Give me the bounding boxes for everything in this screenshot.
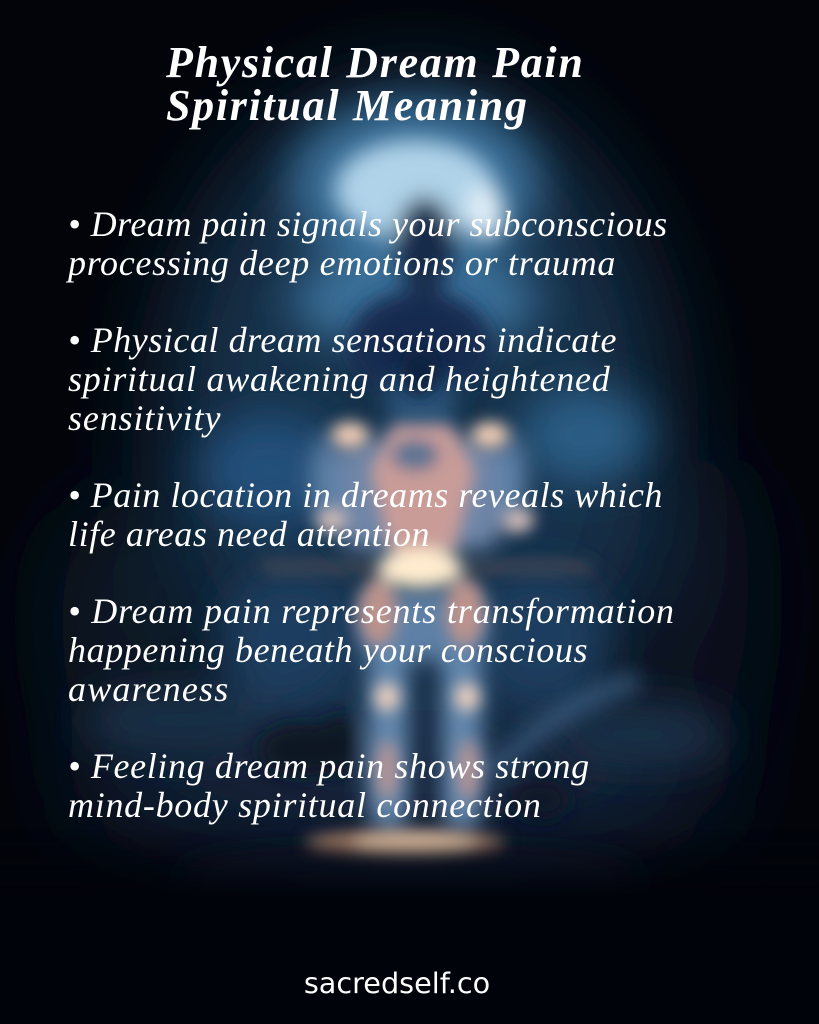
- bullet 1: [66, 204, 668, 283]
- bullet 4: • Dream pain represents transformation: [68, 591, 675, 631]
- bullet 1: • Dream pain signals your subconscious: [68, 204, 668, 244]
- footer website: sacredself.co: [304, 966, 490, 1000]
- title: Spiritual Meaning: [166, 81, 529, 130]
- bullet 3: life areas need attention: [68, 514, 430, 554]
- bullet 1: processing deep emotions or trauma: [68, 243, 616, 283]
- bullet 3: [68, 475, 663, 554]
- bottom fade: [0, 830, 819, 900]
- bullet 5: • Feeling dream pain shows strong: [68, 746, 590, 786]
- title: Physical Dream Pain: [166, 38, 585, 87]
- bullet 3: • Pain location in dreams reveals which: [68, 475, 663, 515]
- bullet 4: awareness: [68, 669, 229, 709]
- bullet 2: sensitivity: [68, 398, 221, 438]
- title: [166, 38, 585, 130]
- bullet 2: [68, 320, 617, 438]
- bullet 2: spiritual awakening and heightened: [68, 359, 610, 399]
- bullet 5: mind-body spiritual connection: [68, 785, 542, 825]
- bullet 4: [68, 591, 675, 709]
- bullet 4: happening beneath your conscious: [68, 630, 588, 670]
- bullet 5: [68, 746, 590, 825]
- bullet 2: • Physical dream sensations indicate: [68, 320, 617, 360]
